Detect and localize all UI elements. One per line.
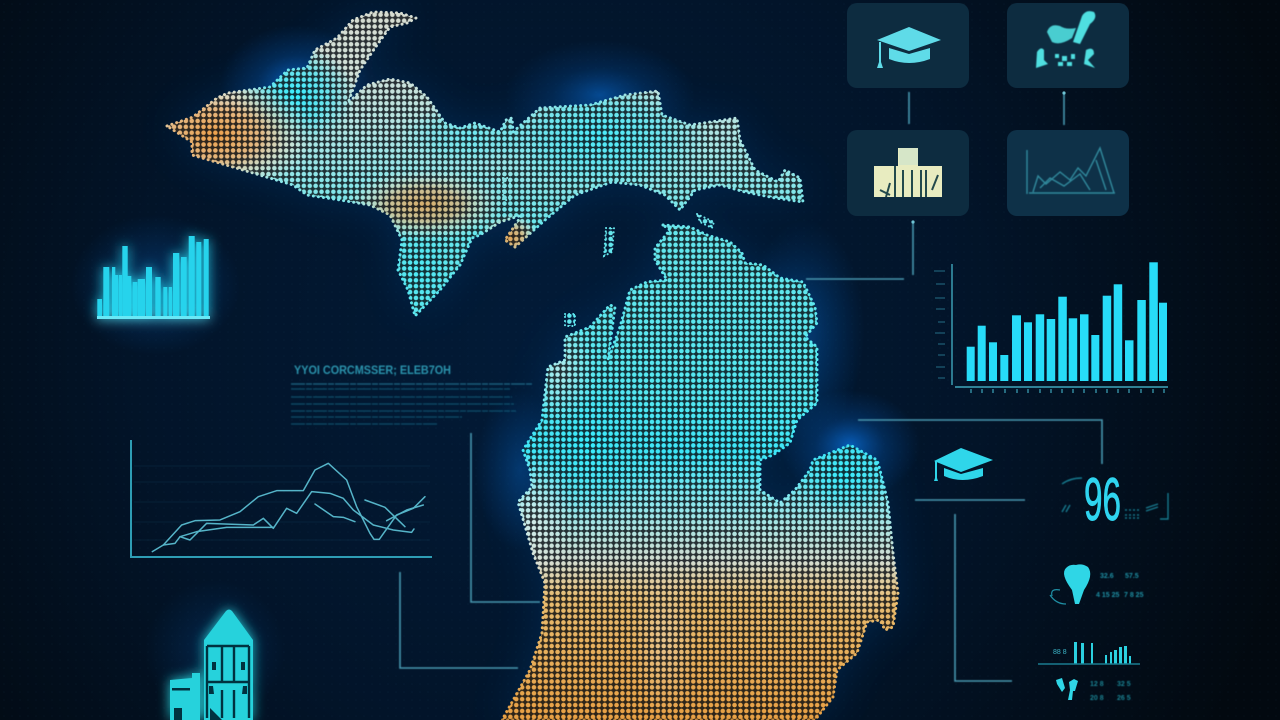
icon: building — [170, 610, 253, 720]
panel: line chart card — [1007, 130, 1129, 216]
icon: mini area chart — [1027, 148, 1115, 194]
icon: pin — [1064, 564, 1090, 604]
stat: mini bars — [1038, 642, 1140, 664]
icon: graduation cap free — [934, 448, 993, 481]
bar chart: small left — [97, 236, 210, 319]
readout details — [1062, 478, 1168, 519]
baseline — [1038, 663, 1140, 665]
icon: emblem — [1036, 11, 1095, 68]
line chart — [131, 440, 432, 557]
heading: YYOI CORCMSSER; ELEB7OH — [294, 363, 451, 377]
figures: 32 5 — [1117, 681, 1131, 688]
icon: cluster — [1056, 678, 1078, 700]
axis ticks — [934, 271, 945, 378]
icon: beige buildings — [874, 148, 942, 197]
figures: 7 8 25 — [1124, 592, 1144, 599]
icon: graduation cap — [877, 27, 941, 68]
bars — [967, 262, 1167, 381]
figures: 20 8 — [1090, 695, 1104, 702]
figures — [1096, 573, 1144, 599]
panel: graduation card — [847, 3, 969, 88]
chart axes — [131, 440, 432, 557]
arrow tips — [911, 91, 1066, 224]
map: coloured dots — [166, 10, 900, 720]
figures: 32.6 — [1100, 573, 1114, 580]
paragraph lines — [291, 384, 532, 424]
connector lines — [400, 92, 1102, 681]
chart grid — [134, 466, 430, 540]
chart series — [152, 463, 425, 552]
icon: swoosh — [1050, 590, 1066, 604]
stat: pin icon with figures — [1050, 564, 1144, 604]
panel: buildings card — [847, 130, 969, 216]
mini bars — [1074, 642, 1131, 664]
map: Michigan dotted silhouette — [166, 10, 900, 720]
figures: 57.5 — [1125, 573, 1139, 580]
map: dark base under the dots — [169, 12, 898, 720]
figures: 12 8 — [1090, 681, 1104, 688]
number: 96 — [1084, 466, 1121, 533]
figures: 26 5 — [1117, 695, 1131, 702]
bar chart: large right — [934, 262, 1168, 393]
metric: 96 readout — [1062, 466, 1168, 533]
figures — [1090, 681, 1131, 702]
label: 88 8 — [1053, 649, 1067, 656]
panel: emblem card — [1007, 3, 1129, 88]
stat: icon with figures — [1056, 678, 1131, 702]
figures: 4 15 25 — [1096, 592, 1119, 599]
axes — [952, 264, 1168, 387]
